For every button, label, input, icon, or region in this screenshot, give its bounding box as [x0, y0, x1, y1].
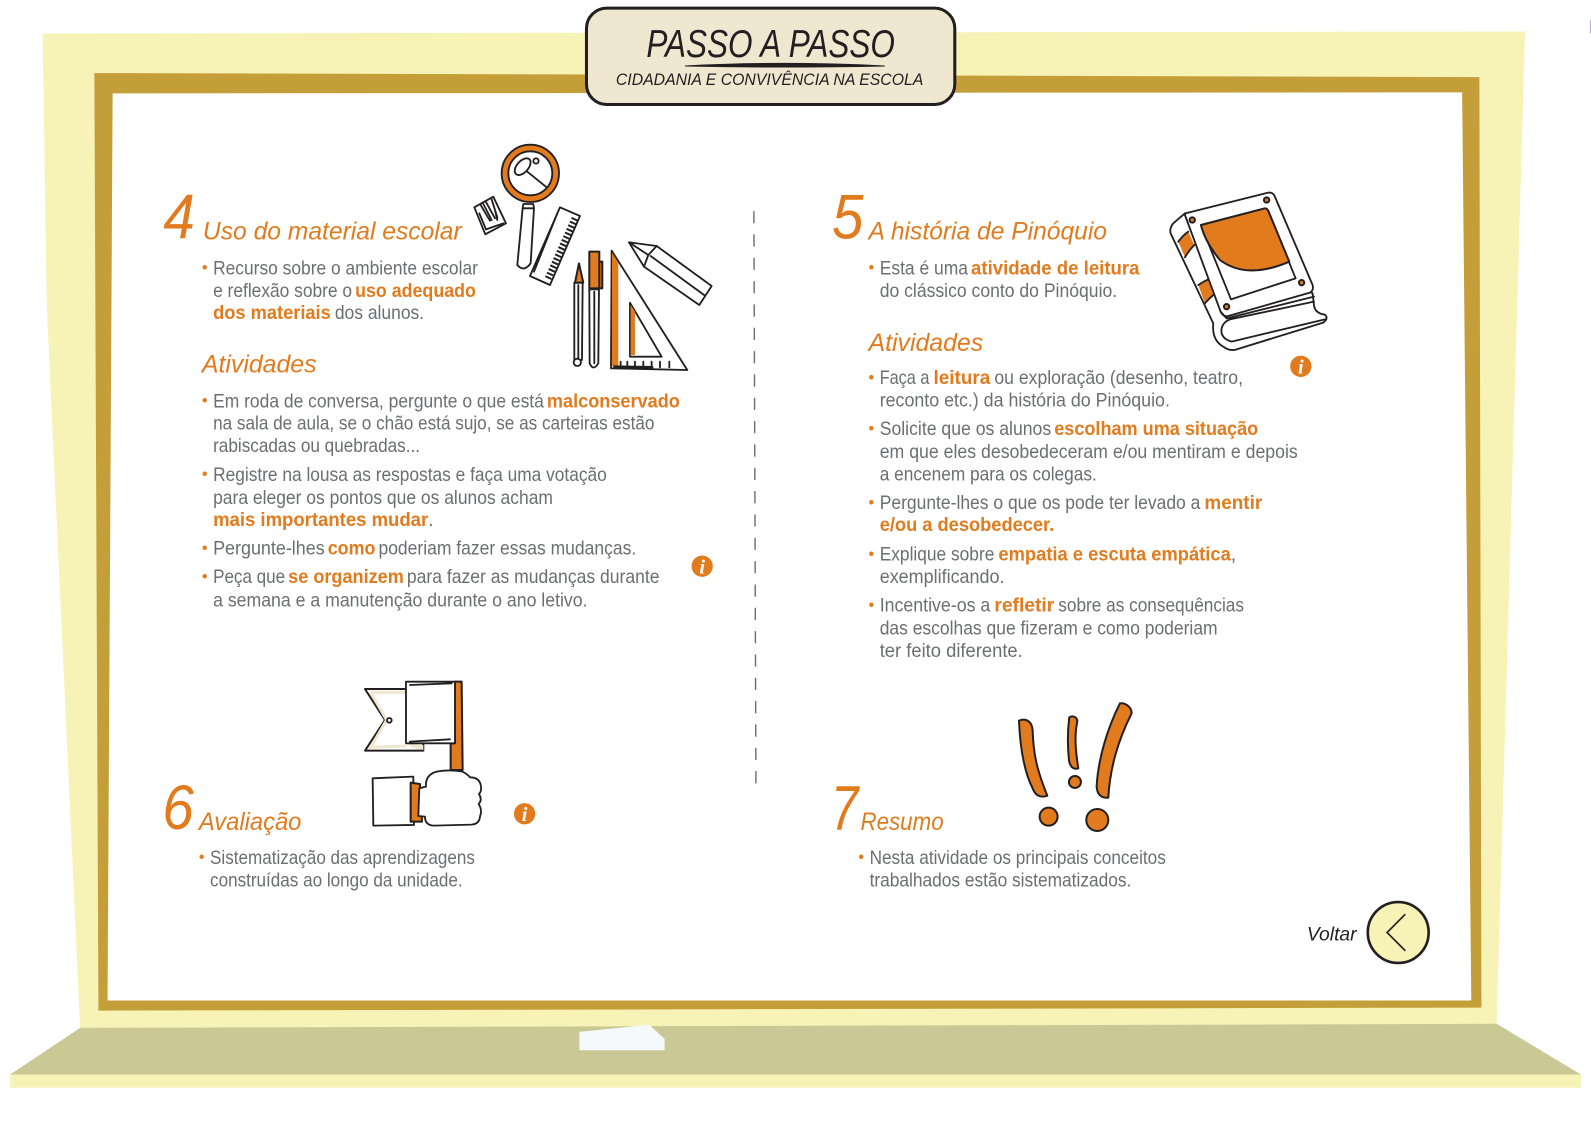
description: •	[858, 848, 864, 866]
panel: step 4	[163, 145, 713, 611]
panel: step 6	[162, 682, 535, 891]
intro text	[202, 258, 478, 324]
activities list: ,	[1231, 545, 1236, 566]
description: Sistematização das aprendizagens	[210, 848, 475, 869]
activities list: sobre as consequências	[1058, 595, 1244, 616]
activities list: •	[869, 546, 875, 564]
heading: uso do material escolar: Uso do material escolar	[203, 217, 463, 245]
back button	[1307, 902, 1429, 963]
activities list: Solicite que os alunos	[880, 419, 1051, 440]
activities list: Faça a	[880, 368, 930, 389]
activities list: a semana e a manutenção durante o ano letivo.	[213, 590, 587, 611]
heading: atividades: Atividades	[200, 350, 317, 378]
heading: a história de pinóquio: A história de Pinóquio	[867, 217, 1107, 245]
activities list: a encenem para os colegas.	[880, 464, 1097, 485]
icon: info: i	[699, 556, 705, 578]
intro text: Recurso sobre o ambiente escolar	[213, 258, 478, 279]
panel: step 5	[832, 182, 1327, 662]
activities list: •	[869, 596, 875, 614]
dashed divider	[754, 211, 756, 783]
icon: info: i	[522, 804, 528, 826]
activities list: Incentive-os a	[880, 595, 991, 616]
heading: atividades: Atividades	[867, 329, 984, 357]
set square	[611, 251, 687, 370]
activities list: empatia e escuta empática	[998, 545, 1231, 566]
chalk tray	[10, 1024, 1581, 1088]
activities list: como	[328, 539, 376, 560]
activities list: Em roda de conversa, pergunte o que está	[213, 391, 544, 412]
activities list: •	[202, 392, 208, 410]
activities list: na sala de aula, se o chão está sujo, se as carteiras estão	[213, 414, 654, 435]
activities list: •	[202, 568, 208, 586]
description	[199, 848, 475, 891]
activities list: Pergunte-lhes o que os pode ter levado a	[880, 493, 1201, 514]
large pencil	[629, 242, 712, 305]
intro text: uso adequado	[355, 281, 476, 302]
activities list: mais importantes mudar	[213, 510, 429, 531]
step number 5: 5	[832, 182, 864, 252]
intro text	[869, 258, 1140, 302]
icon: info	[514, 803, 535, 826]
ruler	[530, 207, 580, 285]
activities list: das escolhas que fizeram e como poderiam	[880, 619, 1218, 640]
step number 4: 4	[163, 182, 195, 252]
activities list	[869, 368, 1298, 662]
activities list: para fazer as mudanças durante	[407, 567, 660, 588]
activities list: Registre na lousa as respostas e faça uma votação	[213, 465, 607, 486]
activities list: Explique sobre	[880, 545, 994, 566]
activities list: mentir	[1204, 493, 1263, 514]
activities list: ou exploração (desenho, teatro,	[994, 368, 1243, 389]
activities list: poderiam fazer essas mudanças.	[378, 539, 636, 560]
activities list: Peça que	[213, 567, 285, 588]
intro text: Esta é uma	[880, 258, 968, 279]
step number 7: 7	[831, 774, 860, 844]
activities list: refletir	[994, 595, 1055, 616]
activities list: se organizem	[288, 567, 404, 588]
intro text: e reflexão sobre o	[213, 281, 352, 302]
back button: Voltar	[1307, 925, 1358, 946]
intro text: •	[869, 259, 875, 277]
description: construídas ao longo da unidade.	[210, 870, 463, 891]
intro text: dos alunos.	[335, 303, 424, 324]
intro text: dos materiais	[213, 303, 331, 324]
heading: avaliação: Avaliação	[197, 808, 301, 836]
title plaque	[586, 8, 955, 105]
activities list: e/ou a desobedecer.	[880, 515, 1054, 536]
pen	[589, 252, 602, 367]
activities list: •	[869, 420, 875, 438]
intro text: do clássico conto do Pinóquio.	[880, 281, 1117, 302]
icon: book	[1170, 193, 1327, 350]
activities list: •	[869, 369, 875, 387]
activities list: •	[869, 494, 875, 512]
intro text: •	[202, 259, 208, 277]
heading: resumo: Resumo	[860, 808, 944, 836]
icon: evaluation hand and notebook	[365, 682, 481, 826]
icon: info	[691, 556, 713, 578]
activities list: rabiscadas ou quebradas...	[213, 436, 420, 457]
magnifying glass	[502, 145, 559, 268]
pencil	[574, 263, 583, 366]
activities list: reconto etc.) da história do Pinóquio.	[880, 390, 1170, 411]
activities list: malconservado	[547, 391, 680, 412]
icon: school supplies	[474, 145, 712, 370]
activities list: escolham uma situação	[1054, 419, 1258, 440]
activities list: ter feito diferente.	[880, 641, 1023, 662]
activities list: •	[202, 540, 208, 558]
activities list: exemplificando.	[880, 567, 1005, 588]
description	[858, 848, 1166, 891]
description: trabalhados estão sistematizados.	[870, 870, 1131, 891]
activities list: Pergunte-lhes	[213, 539, 325, 560]
activities list: para eleger os pontos que os alunos acham	[213, 488, 553, 509]
eraser	[579, 1025, 665, 1050]
title plaque: PASSO A PASSO	[646, 23, 895, 66]
sharpener	[474, 197, 506, 234]
title plaque: CIDADANIA E CONVIVÊNCIA NA ESCOLA	[616, 70, 923, 89]
description: Nesta atividade os principais conceitos	[870, 848, 1166, 869]
activities list	[202, 391, 680, 611]
panel: step 7	[831, 703, 1166, 891]
intro text: atividade de leitura	[971, 258, 1140, 279]
icon: info: i	[1298, 356, 1304, 378]
activities list: .	[428, 510, 434, 531]
description: •	[199, 848, 205, 866]
activities list: em que eles desobedeceram e/ou mentiram e depois	[880, 442, 1298, 463]
activities list: leitura	[933, 368, 991, 389]
icon: exclamation marks	[1019, 703, 1132, 831]
activities list: •	[202, 465, 208, 483]
step number 6: 6	[162, 773, 194, 843]
icon: info	[1290, 356, 1311, 378]
